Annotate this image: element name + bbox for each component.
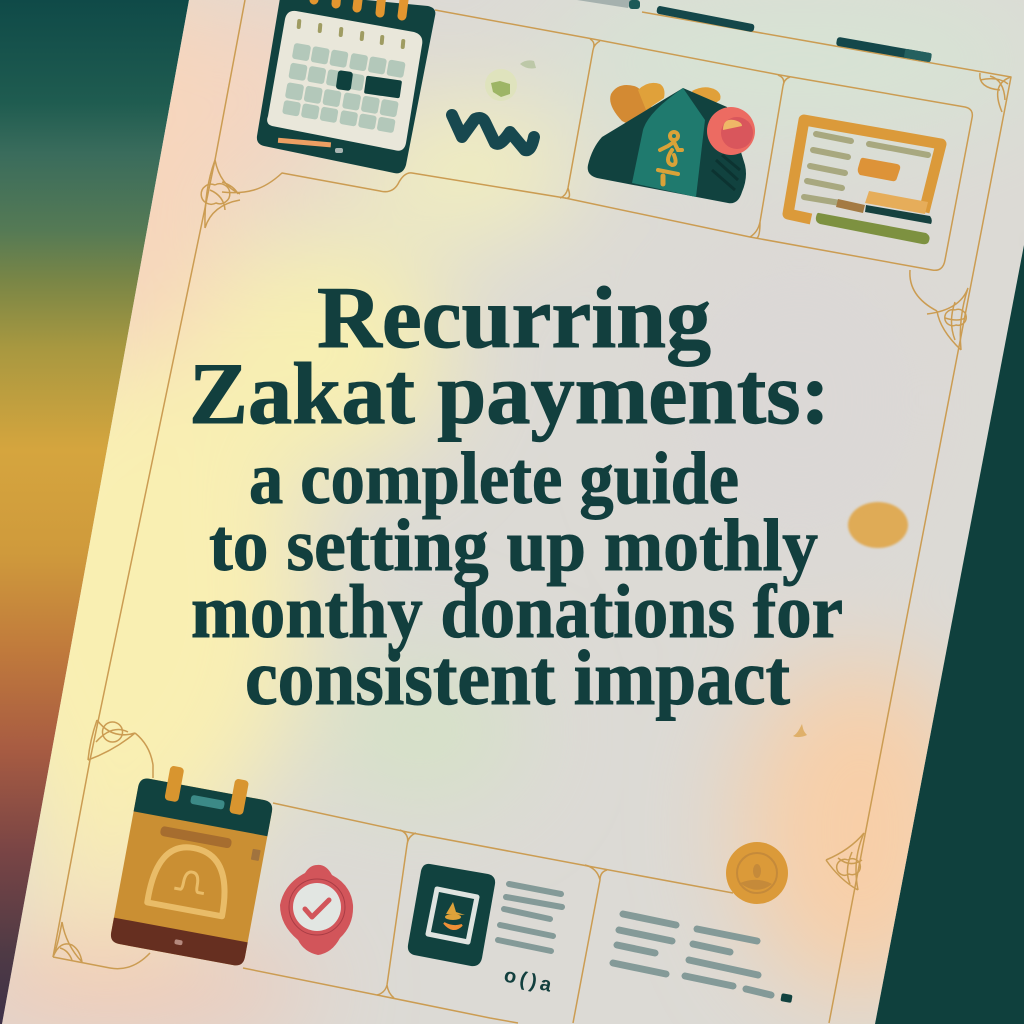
- icon: calendar top left: [257, 0, 435, 173]
- text lines: bottom right panel: [613, 914, 771, 995]
- document left lines: [804, 134, 851, 203]
- calendar title bar: [160, 826, 232, 849]
- text lines: beside portrait card: [498, 884, 562, 951]
- frame: bottom dividers: [377, 830, 607, 1023]
- document right line: [869, 144, 928, 155]
- calendar footer dot: [174, 939, 183, 945]
- document orange block: [858, 158, 900, 181]
- ornament: right upper knot: [927, 288, 968, 350]
- frame: bottom left curve: [53, 733, 153, 969]
- ornament: right lower knot: [826, 833, 864, 890]
- ornament: top right corner knot: [980, 73, 1011, 112]
- calendar highlighted days: [336, 70, 402, 98]
- wallet body: [588, 88, 746, 203]
- title line 1: Recurring: [317, 270, 711, 367]
- subtitle line 1: a complete guide: [249, 438, 739, 520]
- ornament: bottom left corner knot: [53, 922, 82, 962]
- calendar amber body: [109, 777, 274, 967]
- frame: left outer line: [53, 0, 245, 957]
- calendar binder rings: [314, 0, 405, 16]
- subtitle line 2: to setting up mothly: [209, 505, 818, 587]
- frame: top panel row: [222, 10, 972, 270]
- document shaded strip: [836, 199, 865, 213]
- calendar day grid: [282, 43, 406, 133]
- calendar progress bar: [278, 138, 343, 153]
- wallet gold figure: [658, 132, 682, 184]
- wallet centre panel: [632, 88, 705, 197]
- icon: portrait card: [408, 864, 495, 966]
- document green bar: [816, 213, 930, 244]
- icon: bottom left calendar: [109, 760, 277, 967]
- calendar rings: [164, 765, 249, 815]
- icon: wallet with badge: [588, 83, 755, 203]
- stains on paper: [793, 502, 908, 737]
- frame: top dividers: [560, 39, 790, 238]
- red badge: [707, 107, 755, 155]
- frame: right lower curve: [910, 270, 937, 311]
- ornament: left lower knot: [88, 720, 135, 760]
- calendar footer: [109, 918, 248, 967]
- document lower band: [865, 191, 928, 214]
- calendar arch symbol: [147, 841, 233, 916]
- top edge bars: [577, 0, 932, 62]
- frame: top outer line: [642, 12, 1011, 1023]
- small glyph label: o()a: [502, 964, 554, 997]
- icon: amber coin: [726, 842, 788, 904]
- icon: green dot and squiggle: [452, 60, 536, 150]
- icon: red seal with check: [280, 865, 353, 955]
- wallet back tabs: [610, 83, 720, 124]
- calendar pins: [297, 19, 405, 49]
- subtitle line 3: monthy donations for: [191, 570, 843, 654]
- small dark end marker: [780, 993, 793, 1003]
- wallet leaf: [712, 155, 740, 190]
- calendar screen: [267, 11, 422, 151]
- subtitle line 4: consistent impact: [245, 634, 790, 721]
- calendar label pill: [190, 795, 225, 810]
- document orange frame: [788, 120, 941, 219]
- title: [189, 270, 843, 721]
- calendar arch glyph: [174, 869, 207, 894]
- document dark bar: [865, 205, 932, 224]
- icon: document frame: [788, 120, 941, 244]
- calendar body: [257, 0, 435, 173]
- calendar small squares: [251, 849, 261, 861]
- calendar header: [134, 777, 274, 836]
- card dark background: [408, 864, 495, 966]
- card figure: [444, 902, 465, 929]
- title line 2: Zakat payments:: [189, 346, 830, 443]
- card white frame: [428, 889, 477, 942]
- frame: bottom panel row: [243, 803, 733, 1023]
- ornament: top left knot: [201, 160, 240, 228]
